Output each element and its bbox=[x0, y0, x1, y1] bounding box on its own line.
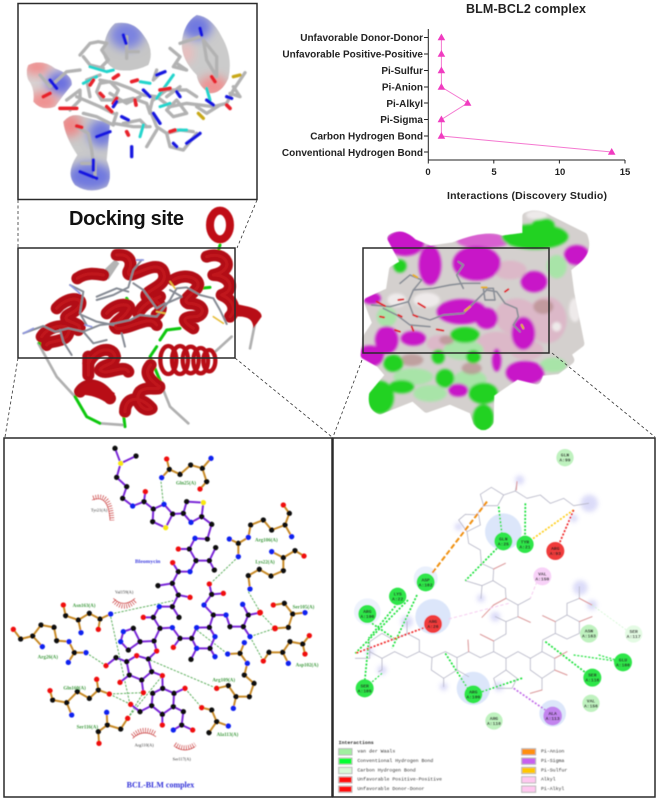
residue names: A:160 bbox=[616, 662, 630, 668]
legend: interactions: Unfavorable Positive-Positive bbox=[357, 777, 442, 783]
residue names: A:156 bbox=[584, 703, 598, 709]
residue names: A:109 bbox=[466, 694, 481, 700]
bleomycin bonds (purple) bbox=[106, 448, 260, 730]
ligand sticks bbox=[40, 37, 245, 178]
y axis labels: Pi-Alkyl bbox=[386, 99, 423, 110]
heading: docking site: Docking site bbox=[69, 208, 184, 230]
legend: interactions: Pi-Sulfur bbox=[541, 767, 567, 773]
legend: interactions: Pi-Anion bbox=[541, 749, 564, 755]
x axis title: Interactions (Discovery Studio) bbox=[447, 190, 607, 202]
frame: LigPlot panel bbox=[4, 438, 332, 797]
residue names: SER bbox=[629, 629, 638, 635]
residue names: VAL bbox=[538, 571, 547, 577]
residue names: A:110 bbox=[487, 721, 501, 727]
connector lines bbox=[5, 200, 655, 437]
big ribbon end bbox=[76, 382, 115, 404]
panel: 2D interaction diagram bbox=[354, 449, 642, 730]
residue and ligand labels: Ala113(A) bbox=[217, 733, 239, 738]
residue names: A:117 bbox=[627, 634, 641, 640]
residue names: TYR bbox=[521, 539, 529, 545]
residue and ligand labels: Arg26(A) bbox=[38, 655, 58, 660]
residue names: A:163 bbox=[582, 634, 596, 640]
top coil bbox=[210, 211, 230, 239]
legend: interactions: Conventional Hydrogen Bond bbox=[357, 758, 433, 764]
legend: interactions: Interactions bbox=[339, 740, 374, 746]
residue and ligand labels: Tyr21(A) bbox=[91, 508, 108, 513]
frame: 2D diagram panel bbox=[333, 438, 655, 797]
residue and ligand labels: Bleomycin bbox=[135, 559, 161, 565]
residue and ligand labels: Lys22(A) bbox=[255, 561, 275, 566]
residue names: GLU bbox=[619, 657, 627, 663]
chart: interactions (Discovery Studio) bbox=[282, 2, 631, 202]
residue and ligand labels: Val159(A) bbox=[115, 589, 134, 594]
residue names: A:106 bbox=[360, 614, 375, 620]
y axis labels: Unfavorable Positive-Positive bbox=[282, 50, 423, 60]
helix coil bbox=[160, 346, 215, 374]
axes bbox=[424, 29, 625, 164]
surface patches bbox=[23, 10, 237, 197]
residues: conventional hydrogen bond bbox=[356, 532, 632, 703]
protein ribbon structure bbox=[23, 211, 262, 427]
residue names: GLN bbox=[499, 536, 508, 542]
legend: interactions: Carbon Hydrogen Bond bbox=[357, 767, 416, 773]
residue and ligand labels: Arg109(A) bbox=[212, 678, 235, 683]
y axis labels: Pi-Sulfur bbox=[381, 66, 423, 77]
residue names: ARG bbox=[429, 619, 437, 625]
x axis tick labels bbox=[425, 167, 631, 178]
nitrogen atoms bbox=[40, 456, 308, 733]
y axis labels: Conventional Hydrogen Bond bbox=[282, 148, 423, 159]
panel: docking close-up with molecular surface patches bbox=[23, 10, 245, 197]
residue names: A:99 bbox=[559, 458, 571, 464]
hydrophobic contact arcs bbox=[92, 497, 195, 750]
residue and ligand labels: Ser116(A) bbox=[77, 726, 98, 731]
ligand bbox=[23, 260, 227, 355]
legend: interactions: Unfavorable Donor-Donor bbox=[357, 786, 424, 792]
carbon atoms bbox=[18, 446, 305, 735]
y axis labels: Unfavorable Donor-Donor bbox=[300, 33, 423, 44]
residue and ligand labels: Gln25(A) bbox=[176, 481, 196, 486]
pale green patches bbox=[377, 255, 567, 402]
residue and ligand labels: Asn163(A) bbox=[73, 604, 96, 609]
residue names: SER bbox=[588, 673, 597, 679]
pale highlights bbox=[387, 210, 581, 331]
green patches bbox=[366, 218, 568, 432]
frame: protein zoom box bbox=[18, 248, 235, 358]
oxygen atoms bbox=[11, 456, 312, 746]
residue names: A:26 bbox=[427, 624, 439, 630]
residue bonds (orange) bbox=[13, 458, 309, 743]
residue names: A:113 bbox=[546, 716, 560, 722]
x axis tick labels: 0 bbox=[425, 167, 431, 178]
residue discs bbox=[356, 449, 642, 730]
residue names: ARG bbox=[490, 716, 498, 722]
residue and ligand labels bbox=[38, 481, 319, 790]
y axis labels: Pi-Anion bbox=[382, 82, 423, 94]
legend: interactions: van der Waals bbox=[357, 749, 395, 755]
magenta patches bbox=[356, 229, 589, 397]
residue names: A:93 bbox=[550, 551, 561, 557]
residue names: ASP bbox=[421, 577, 430, 583]
residue and ligand labels: Asp102(A) bbox=[296, 664, 319, 669]
helices bbox=[42, 255, 233, 412]
interaction dashes bbox=[355, 502, 629, 710]
residue names: A:22 bbox=[392, 596, 403, 602]
residue and ligand labels: Arg110(A) bbox=[135, 742, 154, 747]
residue and ligand labels: Ser105(A) bbox=[293, 605, 315, 610]
residue names: VAL bbox=[587, 698, 595, 704]
residue names: ARG bbox=[363, 609, 372, 615]
small atom halos bbox=[366, 475, 598, 691]
residue names: A:116 bbox=[585, 678, 600, 684]
y axis labels bbox=[282, 33, 423, 159]
residue names: ASN bbox=[585, 629, 593, 635]
x axis tick labels: 5 bbox=[491, 167, 497, 178]
chart title: BLM-BCL2 complex bbox=[466, 2, 586, 16]
residue names: A:159 bbox=[535, 576, 550, 582]
frame: surface zoom box bbox=[363, 248, 549, 353]
residue names: A:21 bbox=[519, 544, 531, 550]
residue: carbon hydrogen bond bbox=[625, 625, 642, 643]
hydrogen bond dashed lines bbox=[86, 482, 275, 718]
data markers bbox=[438, 34, 616, 155]
residue and ligand labels: Gln160(A) bbox=[63, 686, 86, 691]
residue names: SER bbox=[360, 683, 369, 689]
panel: BCL-BLM LigPlot complex bbox=[11, 446, 319, 790]
residue and ligand labels: Arg106(A) bbox=[255, 539, 278, 544]
residue names: ARG bbox=[469, 689, 478, 695]
bound ligand sticks bbox=[372, 262, 520, 332]
legend: interactions: Pi-Sigma bbox=[541, 758, 564, 764]
residues: van der Waals bbox=[485, 449, 600, 730]
legend: interactions: Pi-Alkyl bbox=[541, 786, 564, 792]
molecule skeleton bbox=[355, 482, 592, 693]
legend: interactions: Alkyl bbox=[541, 777, 556, 783]
residue: alkyl bbox=[533, 567, 551, 585]
legend: interactions bbox=[339, 740, 567, 792]
hydrophobicity surface bbox=[360, 210, 590, 431]
residue names bbox=[358, 453, 641, 727]
residue names: A:25 bbox=[498, 541, 509, 547]
pink patches bbox=[427, 261, 567, 360]
residue and ligand labels: Ser117(A) bbox=[173, 756, 191, 761]
frame: docking close-up bbox=[18, 4, 257, 200]
residue names: A:105 bbox=[358, 688, 372, 694]
x axis tick labels: 10 bbox=[555, 167, 565, 178]
residue and ligand labels: BCL-BLM complex bbox=[127, 781, 194, 790]
y axis labels: Carbon Hydrogen Bond bbox=[310, 132, 423, 142]
y axis labels: Pi-Sigma bbox=[380, 115, 423, 126]
data line bbox=[441, 38, 612, 152]
sulfur atoms bbox=[118, 461, 206, 530]
far right strand bbox=[233, 303, 262, 328]
residue names: ARG bbox=[551, 546, 560, 552]
residue: pi-sigma bbox=[543, 707, 562, 725]
residues: unfavorable bbox=[424, 542, 564, 633]
residue names: GLN bbox=[561, 453, 569, 459]
x axis tick labels: 15 bbox=[620, 167, 631, 178]
large halos bbox=[354, 513, 566, 727]
residue names: A:102 bbox=[419, 582, 433, 588]
residue names: LYS bbox=[393, 591, 402, 597]
residue names: ALA bbox=[548, 711, 557, 717]
